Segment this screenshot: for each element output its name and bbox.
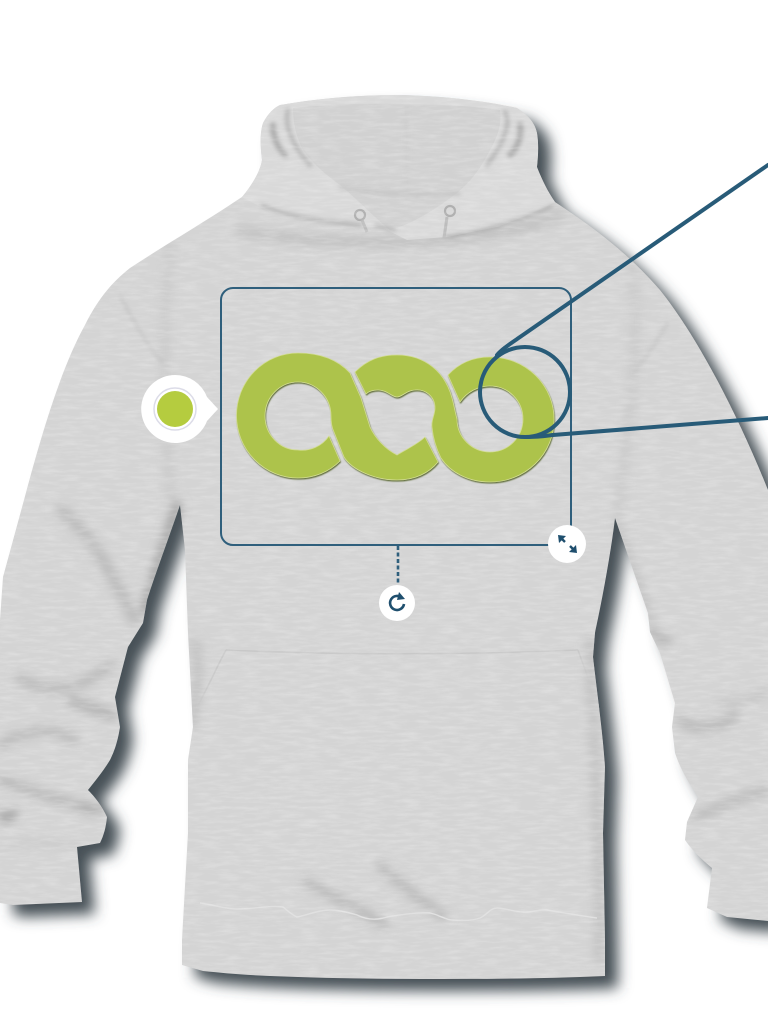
rotate connector bbox=[397, 546, 399, 585]
hood outer bbox=[394, 122, 555, 240]
hood opening shadows bbox=[262, 105, 552, 237]
pocket bbox=[192, 650, 604, 720]
placement box bbox=[221, 288, 571, 545]
seams bbox=[120, 295, 668, 372]
printed logo bbox=[237, 353, 554, 482]
waistband seam bbox=[200, 903, 597, 920]
resize handle bbox=[548, 525, 586, 563]
hoodie shading folds bbox=[0, 215, 768, 960]
magnifier callout bbox=[480, 165, 768, 437]
logo: right band bbox=[355, 355, 554, 482]
drawstrings and eyelets bbox=[355, 206, 455, 238]
logo: left and heart band bbox=[237, 353, 438, 480]
color swatch picker bbox=[141, 375, 218, 443]
hood inner bbox=[293, 104, 500, 230]
rotate handle bbox=[379, 585, 415, 621]
